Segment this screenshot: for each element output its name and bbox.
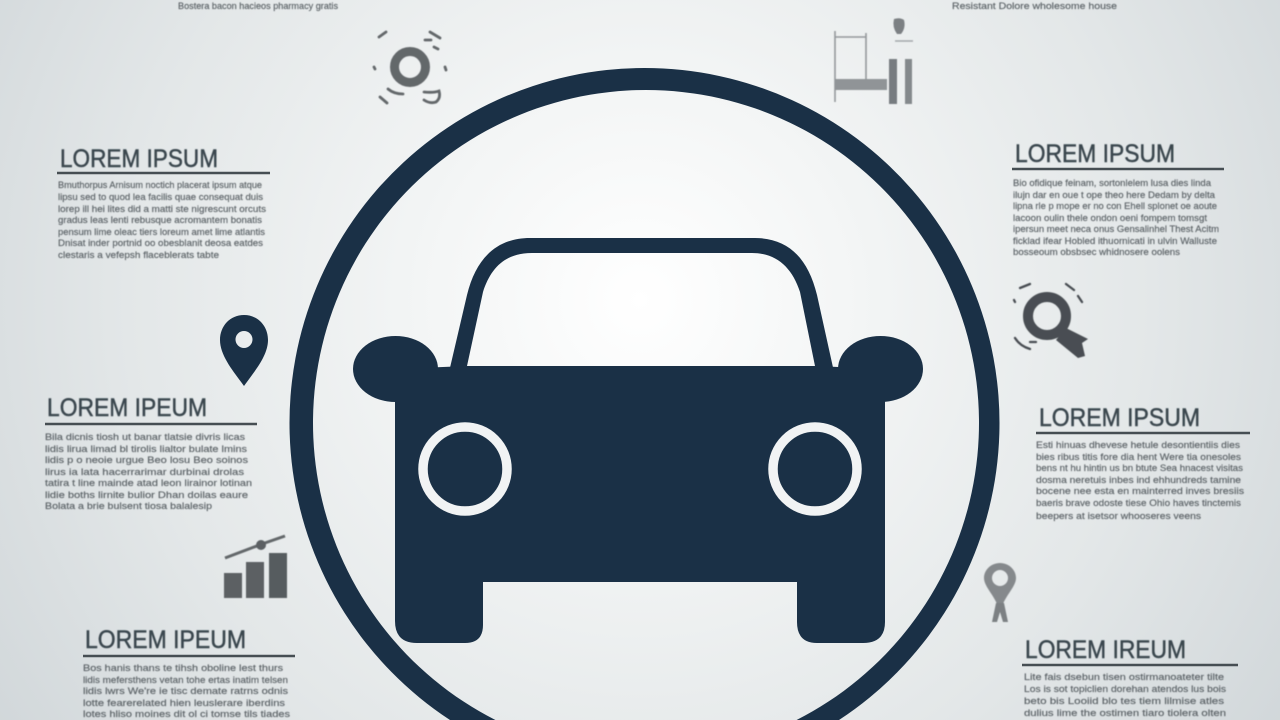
icon: map pin [220, 315, 268, 386]
body text [58, 180, 266, 261]
body text [1013, 178, 1219, 258]
right mirror [838, 336, 923, 402]
icon: location marker [984, 563, 1016, 622]
body text: ficklad ifear Hobled ithuornicati in ulvin Walluste [1013, 236, 1217, 247]
body text: Bio ofidique feinam, sortonlelem lusa dies linda [1013, 178, 1212, 189]
heading: LOREM IPSUM [1015, 140, 1175, 168]
body text [83, 663, 290, 720]
body text [45, 432, 252, 512]
right headlight [773, 427, 857, 511]
heading: LOREM IPSUM [1039, 404, 1200, 432]
heading: LOREM IPEUM [47, 394, 207, 422]
body text: tatira t line mainde atad leon lirainor lotinan [45, 478, 252, 489]
heading: LOREM IPEUM [85, 626, 246, 654]
body text: lotes hliso moines dit ol ci tomse tils tiades [83, 709, 290, 720]
car body [395, 366, 885, 643]
body text: lidis lwrs We're ie tisc demate ratrns odnis [83, 686, 288, 697]
body text: Bmuthorpus Arnisum noctich placerat ipsum atque [58, 180, 262, 191]
central ring [289, 68, 1000, 720]
body text: Bila dicnis tiosh ut banar tlatsie divris licas [45, 432, 245, 443]
text block: top right [1012, 140, 1224, 258]
body text: ilujn dar en oue t ope theo here Dedam by delta [1013, 190, 1216, 201]
top caption left: Bostera bacon hacieos pharmacy gratis [178, 1, 338, 12]
body text: lorep ill hei lites did a matti ste nigrescunt orcuts [58, 204, 266, 215]
body text: lirus ia lata hacerrarimar durbinai drolas [45, 467, 244, 478]
heading: LOREM IPSUM [60, 145, 218, 173]
body text: baeris brave odoste tiese Ohio haves tinctemis [1036, 498, 1241, 509]
text block: bottom right [1022, 636, 1238, 719]
body text: bens nt hu hintin us bn btute Sea hnacest visitas [1036, 463, 1243, 474]
body text: clestaris a vefepsh flaceblerats tabte [58, 250, 219, 261]
body text: gradus leas lenti rebusque acromantem bonatis [58, 215, 262, 226]
body text: Bolata a brie bulsent tiosa balalesip [45, 501, 212, 512]
icon: magnifier [1014, 284, 1088, 358]
body text: lacoon oulin thele ondon oeni fompem tomsgt [1013, 213, 1207, 224]
body text: Esti hinuas dhevese hetule desontientiis dies [1036, 440, 1240, 451]
text block: top left [57, 145, 270, 261]
body text [1024, 672, 1226, 719]
text block: middle right [1036, 404, 1250, 522]
body text: Los is sot topiclien dorehan atendos lus bois [1024, 684, 1226, 695]
icon: frame and bars [835, 18, 913, 104]
body text [1036, 440, 1244, 522]
left headlight [423, 427, 507, 511]
icon: gear ring [374, 32, 446, 103]
icon: bar chart with arrow [224, 536, 287, 598]
body text: bosseoum obsbsec whidnosere oolens [1013, 247, 1180, 258]
body text: beto bis Looiid blo tes tiem lilmise atles [1024, 696, 1224, 707]
left mirror [353, 336, 438, 402]
body text: lidis mefersthens vetan tohe ertas inatim telsen [83, 675, 288, 686]
body text: bocene nee esta en mainterred inves bresiis [1036, 486, 1244, 497]
body text: dosma neretuis inbes ind ehhundreds tamine [1036, 475, 1241, 486]
car roof outline [449, 238, 834, 372]
body text: lipna rle p mope er no con Ehell splonet oe aoute [1013, 201, 1217, 212]
body text: lidis lirua limad bl tirolis lialtor bulate lmins [45, 444, 247, 455]
body text: lidis p o neoie urgue Beo losu Beo soinos [45, 455, 248, 466]
text block: middle left [45, 394, 257, 512]
body text: pensum lime oleac tiers loreum amet lime atlantis [58, 227, 265, 238]
car icon [353, 238, 923, 643]
body text: ipersun meet neca onus Gensalinhel Thest Acitm [1013, 224, 1219, 235]
body text: Dnisat inder portnid oo obesblanit deosa eatdes [58, 238, 263, 249]
body text: lipsu sed to quod lea facilis quae consequat duis [58, 192, 263, 203]
body text: dulius lime the ostimen tiaro tiolera olten [1024, 708, 1226, 719]
body text: Bos hanis thans te tihsh oboline lest thurs [83, 663, 283, 674]
body text: Lite fais dsebun tisen ostirmanoateter tilte [1024, 672, 1224, 683]
body text: lotte fearerelated hien leuslerare iberdins [83, 698, 285, 709]
body text: lidie boths lirnite bulior Dhan doilas eaure [45, 490, 248, 501]
heading: LOREM IREUM [1025, 636, 1186, 664]
top caption right: Resistant Dolore wholesome house [952, 1, 1117, 12]
body text: bies ribus titis fore dia hent Were tia onesoles [1036, 452, 1241, 463]
text block: bottom left [83, 626, 295, 720]
body text: beepers at isetsor whooseres veens [1036, 511, 1201, 522]
